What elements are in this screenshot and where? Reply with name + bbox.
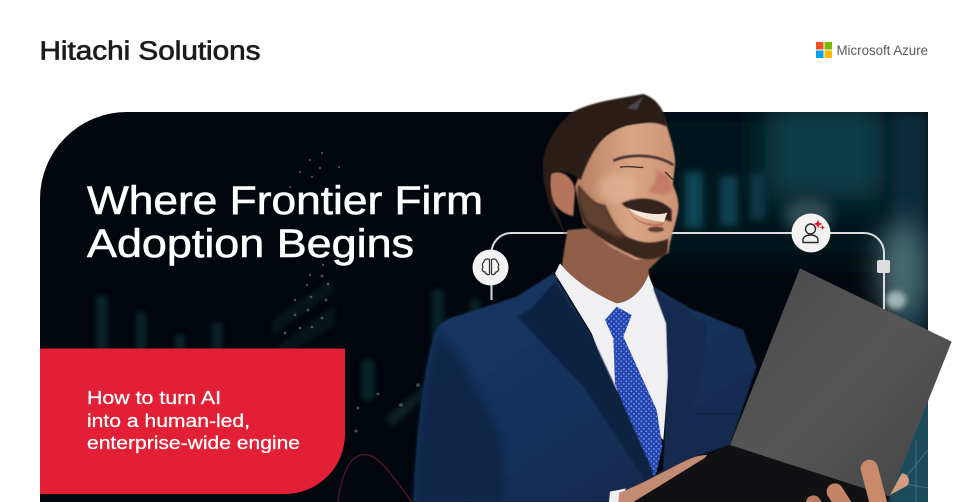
tie (605, 307, 662, 478)
logo: Hitachi Solutions: Hitachi Solutions (40, 38, 260, 66)
right hand thumb behind (890, 473, 909, 495)
panel: dark hero background (40, 105, 938, 502)
lower lip (628, 210, 665, 226)
icon: brain (472, 250, 508, 286)
background: blurred teal city lights (685, 105, 938, 502)
photo: businessman holding laptop (413, 94, 952, 502)
sleeve shadow (413, 330, 505, 502)
stubble (578, 185, 627, 237)
title (87, 179, 483, 266)
beard (578, 185, 668, 259)
icon: person with sparkles (792, 214, 830, 252)
panel: red callout (40, 348, 345, 494)
soul patch (648, 227, 664, 232)
title: Adoption Begins (87, 222, 414, 266)
lapel left (517, 282, 653, 480)
hair (543, 94, 667, 237)
lapel right (653, 288, 707, 470)
logo: Microsoft Azure: Microsoft Azure (836, 43, 928, 58)
mustache and smile (622, 199, 672, 222)
face (575, 120, 678, 260)
subtitle text: How to turn AI (87, 387, 221, 408)
subtitle text: enterprise-wide engine (87, 432, 300, 453)
title: Where Frontier Firm (87, 179, 483, 223)
suit jacket (413, 273, 757, 502)
ear (550, 172, 575, 216)
laptop base (633, 445, 890, 502)
background: candlestick glow bars (96, 290, 480, 400)
cheek highlight (598, 173, 635, 203)
shirt (555, 263, 668, 440)
nose shadow (647, 170, 673, 195)
subtitle text: into a human-led, (87, 410, 250, 431)
background: red trend line (338, 455, 412, 502)
left hand (618, 455, 707, 502)
icon: connector square node (877, 260, 890, 273)
laptop lid (730, 268, 952, 497)
eyes and brow (613, 156, 673, 165)
background: building window lights (273, 152, 423, 432)
subtitle text (87, 387, 300, 453)
shirt cuff (609, 488, 626, 502)
connector: rounded outline (492, 233, 884, 320)
right hand fingers (813, 468, 879, 502)
neck (555, 223, 668, 310)
